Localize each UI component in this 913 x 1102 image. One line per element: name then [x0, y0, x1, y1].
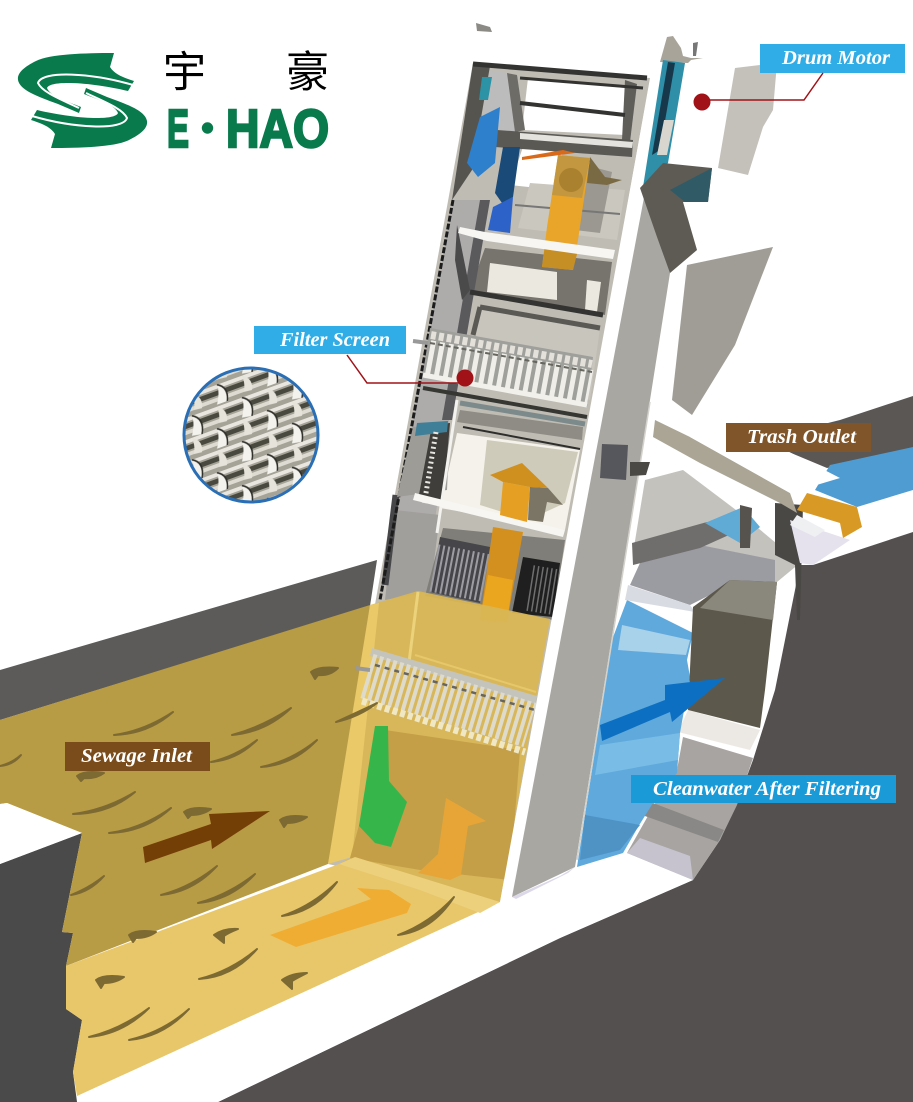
sewage water over machine	[328, 591, 550, 913]
white cross beam lower	[413, 493, 565, 537]
cleanwater pool	[577, 600, 693, 867]
upper windows	[522, 78, 625, 135]
frame lines	[380, 64, 647, 600]
channel wall: lower left	[0, 833, 82, 1102]
green bottom scoop	[359, 726, 407, 847]
logo wordmark	[167, 99, 329, 159]
white post	[437, 400, 457, 533]
label: Cleanwater After Filtering	[631, 775, 896, 803]
machine interior	[328, 63, 650, 902]
dot: Drum Motor	[694, 94, 710, 110]
left chain	[397, 421, 450, 505]
filter screen: lower	[355, 652, 536, 752]
stone side wall	[627, 737, 753, 880]
sewage debris marks	[0, 668, 454, 1040]
stone ledge	[678, 710, 760, 750]
label: Sewage Inlet: Sewage Inlet	[81, 745, 193, 767]
column: grey face	[512, 187, 672, 897]
logo wordmark: HAO	[226, 99, 329, 159]
orange floor arrow	[270, 888, 411, 947]
outlet channel water	[815, 447, 913, 507]
label: Filter Screen	[254, 326, 474, 386]
label: Drum Motor: Drum Motor	[781, 47, 890, 69]
drum motor assembly	[640, 36, 777, 273]
logo chinese characters: 豪	[286, 49, 329, 97]
leader line: Filter Screen	[347, 355, 465, 383]
left side of frame	[397, 200, 480, 520]
filter screen: upper	[413, 328, 593, 424]
inset: filter screen close-up	[184, 368, 318, 502]
arrow: cleanwater flow	[600, 678, 725, 741]
control box on column	[600, 444, 650, 480]
label: Drum Motor	[694, 44, 905, 110]
white cross beam upper	[458, 227, 615, 259]
grate	[425, 528, 565, 620]
label: Trash Outlet: Trash Outlet	[747, 426, 858, 448]
right ground: upper dark wall	[760, 396, 913, 468]
hopper panel	[672, 247, 773, 415]
white front ledge	[77, 850, 693, 1102]
lower panels	[457, 410, 583, 440]
label: Trash Outlet	[726, 423, 871, 452]
sump machinery under chute	[625, 470, 850, 728]
leader line: Drum Motor	[702, 73, 823, 100]
sewage water: floor	[66, 864, 500, 1096]
dot: Filter Screen	[456, 370, 474, 386]
small top fitting	[476, 23, 492, 32]
blue drive belt	[467, 77, 520, 233]
white strip: column edge	[500, 80, 665, 902]
panels under top beam	[510, 147, 563, 190]
logo: E-HAO	[18, 49, 329, 159]
white ledge left	[0, 803, 82, 864]
sewage water: back wall	[0, 605, 370, 966]
foreground wall: dark	[218, 532, 913, 1102]
arrow: upper orange	[522, 150, 622, 270]
logo chinese characters: 宇	[163, 49, 206, 97]
label: Filter Screen: Filter Screen	[279, 329, 390, 351]
column highlight	[577, 402, 650, 860]
arrow: middle orange	[480, 463, 563, 622]
base stone tint	[512, 867, 575, 899]
arrow: sewage flow	[143, 811, 270, 863]
panels below first beam	[470, 248, 612, 315]
logo mark: green S	[18, 53, 147, 148]
label: Cleanwater After Filtering: Cleanwater After Filtering	[653, 778, 881, 800]
orange upright arrow	[418, 798, 486, 880]
arrow: trash out	[797, 493, 862, 538]
trash chute	[653, 420, 862, 538]
channel wall: upper left	[0, 560, 377, 720]
label: Sewage Inlet	[65, 742, 210, 771]
logo wordmark: E	[167, 99, 189, 159]
